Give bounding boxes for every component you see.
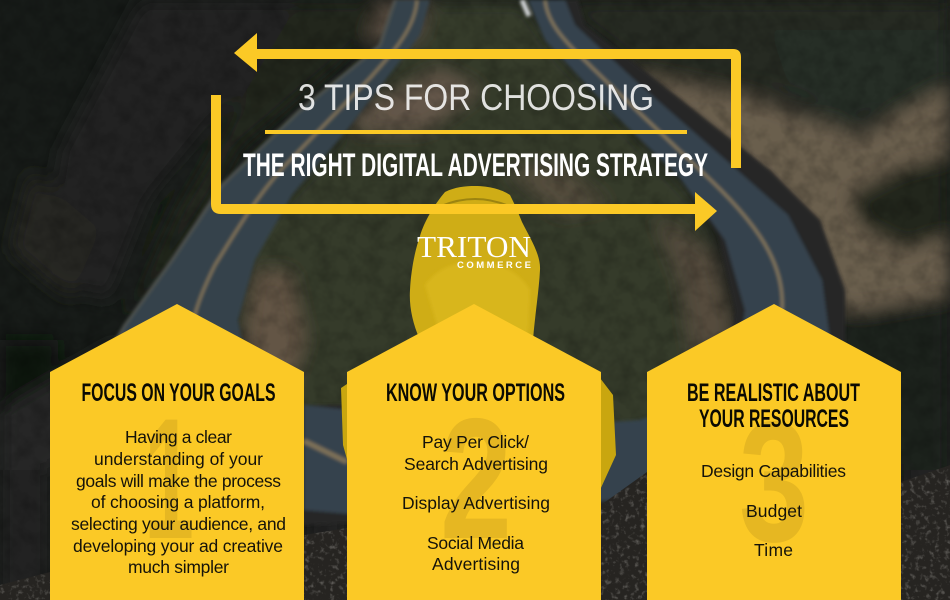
number 3: 3 [739,386,809,578]
heading: be realistic about your resources: YOUR RESOURCES [699,405,849,433]
panel: focus on your goals [50,304,304,600]
heading: focus on your goals: FOCUS ON YOUR GOALS [82,379,276,407]
list: resources: Budget [746,501,802,521]
number 2: 2 [440,383,512,575]
body text: goals [71,427,286,577]
list: advertising options: Search Advertising [404,454,548,474]
person in yellow raincoat [341,186,616,490]
list: advertising options: Advertising [432,554,520,574]
arrow: bottom, pointing right [211,95,717,231]
heading: be realistic about your resources [687,379,860,433]
rocky ground foreground [0,460,950,600]
list: advertising options: Social Media [427,533,524,553]
title divider [265,130,687,134]
body text: goals: goals will make the process [76,471,281,491]
list: advertising options: Pay Per Click/ [422,432,529,452]
title: first line: 3 TIPS FOR CHOOSING [298,77,654,118]
list: resources: Time [754,540,793,560]
list: advertising options [402,432,550,574]
body text: goals: developing your ad creative [73,536,283,556]
list: resources: Design Capabilities [701,461,846,481]
panel: be realistic about your resources [647,304,901,600]
body text: goals: of choosing a platform, [91,492,265,512]
title: second line: THE RIGHT DIGITAL ADVERTISING STRATEGY [243,147,708,183]
body text: goals: Having a clear [125,427,232,447]
arrow: top, pointing left [234,33,741,168]
road left and right branches [60,0,845,525]
list: advertising options: Display Advertising [402,493,550,513]
logo: Triton Commerce: TRITON [417,229,531,264]
body text: goals: understanding of your [94,449,263,469]
body text: goals: much simpler [128,557,229,577]
list: resources [701,461,846,560]
body text: goals: selecting your audience, and [71,514,286,534]
panel: know your options [347,304,601,600]
heading: know your options: KNOW YOUR OPTIONS [386,379,565,407]
heading: be realistic about your resources: BE REALISTIC ABOUT [687,379,860,407]
number 1: 1 [144,383,194,575]
logo: Triton Commerce: COMMERCE [457,260,531,271]
